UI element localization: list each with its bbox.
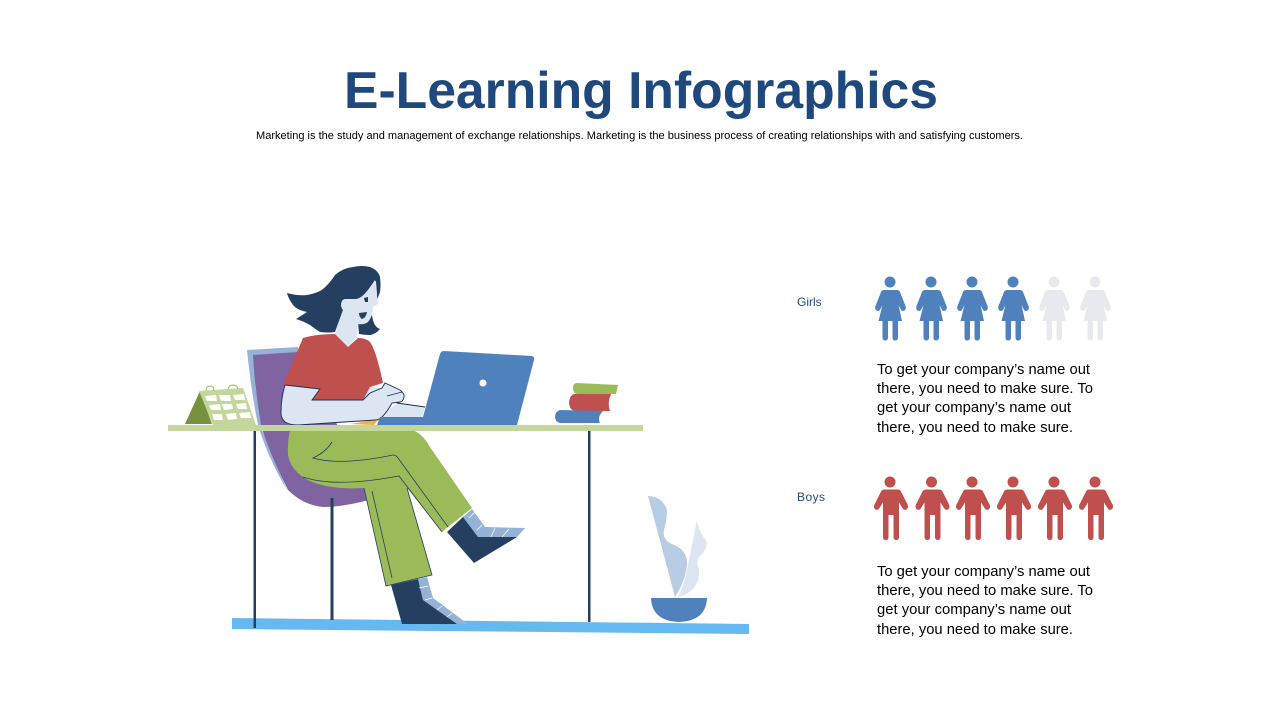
arm outline (281, 383, 425, 425)
text block: girls: get your company’s name out (877, 399, 1072, 416)
text block: girls (877, 361, 1093, 436)
floor (232, 618, 749, 634)
legs in green trousers (288, 431, 472, 586)
pictogram: girls 4 of 6 (875, 276, 1111, 340)
text block: girls: To get your company’s name out (877, 361, 1091, 378)
text block: boys: there, you need to make sure. (877, 621, 1073, 638)
hair strand right (358, 315, 380, 335)
label: boys: Boys (797, 490, 825, 504)
chair (247, 347, 376, 620)
pictogram: boys 6 of 6 (874, 476, 1113, 540)
shirt hem (350, 417, 381, 425)
label: girls: Girls (797, 295, 822, 309)
calendar (185, 385, 256, 425)
text block: boys: there, you need to make sure. To (877, 582, 1093, 599)
text block: boys: To get your company’s name out (877, 563, 1091, 580)
forearm reaching to keyboard (378, 403, 425, 418)
eye and mouth (359, 297, 368, 319)
text block: boys (877, 563, 1093, 638)
text block: girls: there, you need to make sure. To (877, 380, 1093, 397)
desk top (168, 425, 643, 431)
books (555, 383, 618, 423)
raised foot (447, 509, 525, 563)
hair (287, 266, 380, 332)
arm and hand (281, 383, 404, 425)
desk legs (254, 431, 590, 628)
title: E-Learning Infographics (344, 62, 938, 120)
neck and face (335, 280, 378, 347)
planted foot (391, 577, 468, 624)
text block: boys: get your company’s name out (877, 601, 1072, 618)
shirt (283, 334, 383, 400)
illustration: woman studying at desk (168, 266, 749, 634)
potted plant (648, 496, 707, 622)
text block: girls: there, you need to make sure. (877, 419, 1073, 436)
subtitle text: Marketing is the study and management of exchange relationships. Marketing is the business process of creating relationships with and satisfying customers. (256, 130, 1023, 142)
laptop (377, 351, 534, 425)
